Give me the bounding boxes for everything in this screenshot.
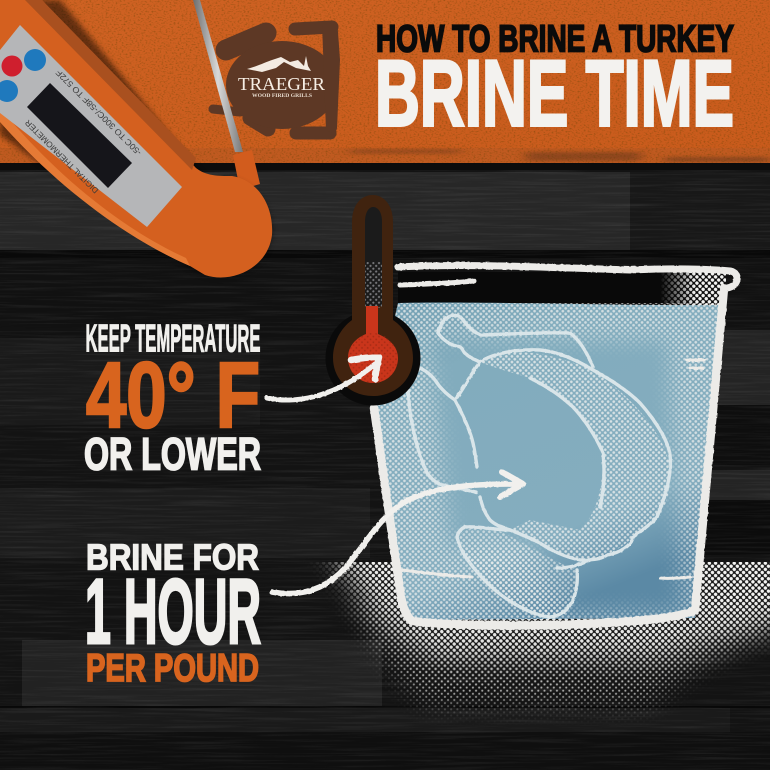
water (376, 303, 723, 620)
bulb black outline (326, 310, 420, 406)
blue button lower (0, 80, 18, 102)
digital thermometer label: DIGITAL THERMOMETER (23, 118, 100, 195)
per pound: PER POUND (86, 647, 259, 690)
Traeger wordmark: TRAEGER (238, 74, 325, 94)
thermometer red mercury (348, 306, 398, 383)
body lower edge (0, 108, 190, 266)
halftone drumstick (457, 528, 577, 617)
range label: -50C TO 300C/-58F TO 572F (54, 68, 143, 158)
red button (2, 56, 22, 76)
header band (0, 0, 770, 170)
turkey silhouette (213, 24, 340, 133)
thermometer body (0, 0, 272, 277)
probe collar (233, 150, 260, 190)
thermometer shadow (0, 0, 272, 277)
callout: keep temperature (84, 318, 261, 480)
callout: brine time per pound (85, 536, 261, 690)
bucket outline (374, 265, 737, 625)
or lower: OR LOWER (84, 428, 261, 480)
dark interior above water (398, 272, 724, 308)
body upper edge (25, 0, 196, 170)
thermometer empty channel (365, 207, 382, 306)
logo tagline: WOOD FIRED GRILLS (252, 94, 312, 99)
halftone table surface (316, 562, 770, 720)
mountain mark (247, 56, 311, 72)
arrow to turkey (272, 472, 523, 594)
turkey line drawing (408, 315, 670, 617)
halftone along walls (376, 303, 723, 620)
metal probe (193, 0, 243, 152)
Traeger logo (213, 24, 340, 133)
thermometer illustration (326, 195, 420, 406)
silver display plate (0, 25, 182, 227)
text: KEEP TEMPERATURE (86, 318, 260, 360)
LCD screen (27, 83, 132, 188)
thermometer brown casing (333, 195, 413, 396)
blue button (24, 49, 46, 71)
halftone turkey body rim (480, 352, 670, 560)
brine bucket (374, 265, 737, 625)
brine for: BRINE FOR (86, 536, 259, 578)
40 degrees F: 40° F (86, 343, 260, 447)
arrow to thermometer (267, 357, 379, 400)
1 hour: 1 HOUR (85, 561, 261, 663)
digital thermometer photo (0, 0, 272, 277)
